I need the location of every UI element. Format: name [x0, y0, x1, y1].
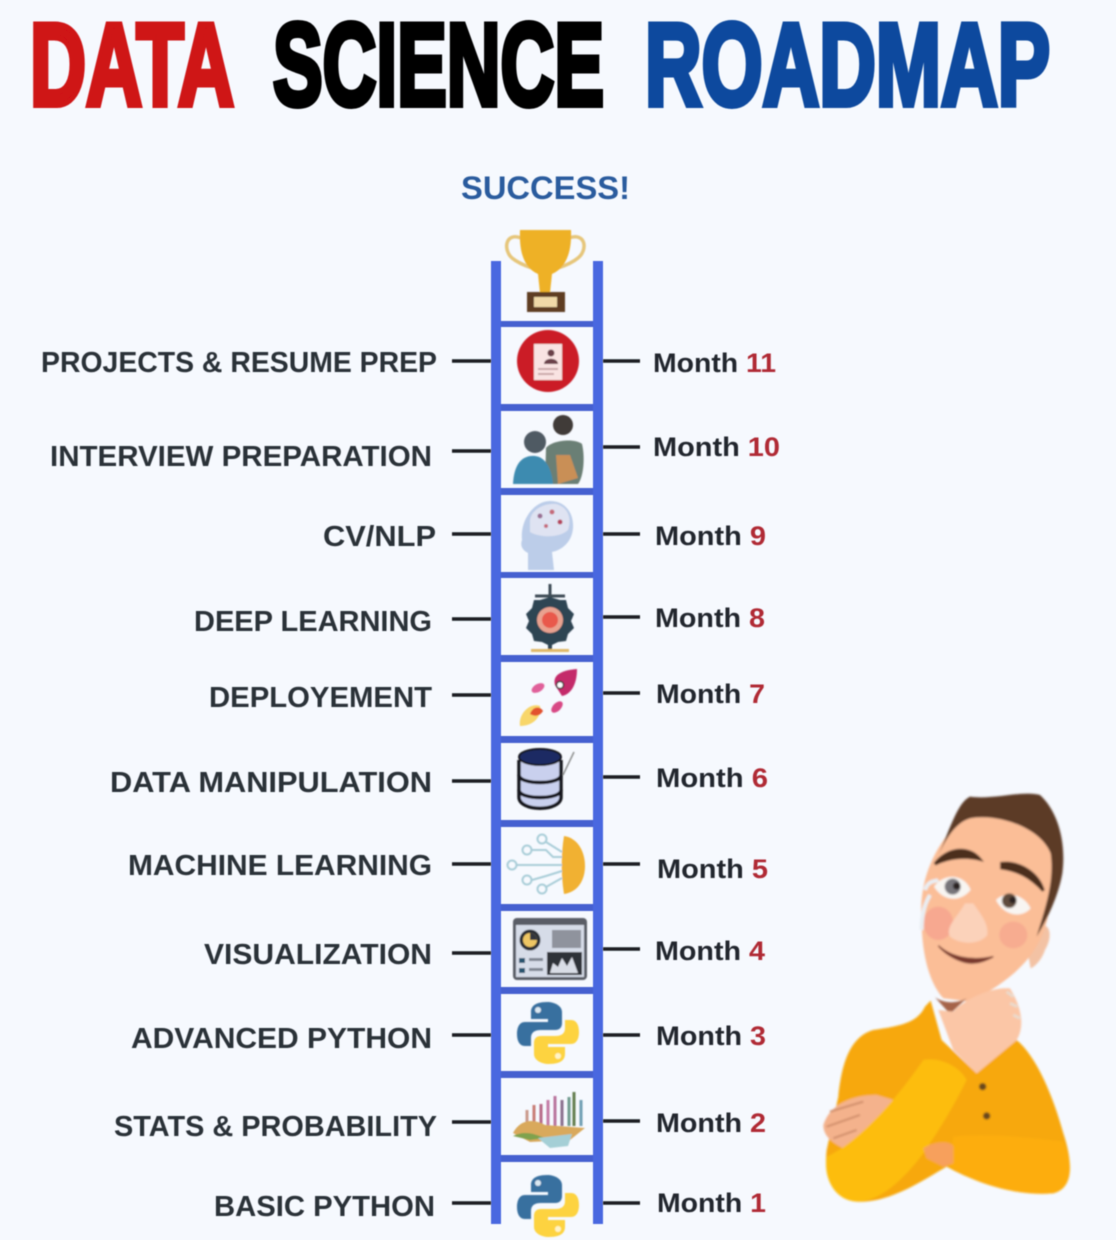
- hand on chin: [938, 988, 1021, 1073]
- label: deep learning: DEEP LEARNING: [194, 606, 432, 638]
- month 2: Month 2: [656, 1108, 766, 1138]
- heading: success: SUCCESS!: [461, 170, 630, 206]
- label: visualization: VISUALIZATION: [204, 939, 432, 971]
- month 10: Month 10: [653, 432, 780, 462]
- month 8: Month 8: [655, 603, 765, 633]
- fist under arm: [923, 1142, 953, 1167]
- label: cv/nlp: CV/NLP: [323, 521, 436, 553]
- eye right: [996, 895, 1031, 914]
- ear: [1027, 926, 1050, 968]
- icon: interview people: [513, 415, 584, 484]
- title: SCIENCE: [273, 0, 604, 130]
- pupil right: [1009, 897, 1016, 903]
- icon: stats chart: [513, 1092, 585, 1148]
- icon: database: [519, 749, 574, 808]
- label: basic python: BASIC PYTHON: [214, 1191, 435, 1223]
- month 1: Month 1: [657, 1188, 766, 1218]
- neck shadow: [935, 997, 967, 1014]
- hair: [935, 794, 1063, 937]
- lower sleeve: [950, 1135, 1070, 1194]
- icon: resume: [517, 330, 579, 392]
- face: [921, 817, 1053, 1002]
- month 11: Month 11: [653, 348, 776, 378]
- forearm bright: [826, 1059, 967, 1202]
- icon: python logo (basic): [517, 1175, 579, 1237]
- knuckles: [1007, 992, 1020, 1018]
- month 3: Month 3: [656, 1021, 766, 1051]
- icon: rocket: [520, 669, 577, 726]
- right month labels: [603, 348, 780, 1218]
- right cheek: [999, 922, 1027, 948]
- nose: [949, 903, 988, 943]
- glasses highlight: [922, 880, 938, 930]
- iris right: [1002, 893, 1017, 908]
- icon: brain head: [521, 501, 573, 570]
- title: [30, 0, 1050, 130]
- left labels: [41, 347, 491, 1223]
- button upper: [979, 1083, 986, 1090]
- month 6: Month 6: [656, 763, 768, 793]
- eyebrow left: [935, 850, 980, 864]
- icon: python logo (advanced): [517, 1002, 579, 1064]
- fingers: [827, 1102, 863, 1138]
- ladder: [491, 261, 603, 1224]
- label: machine learning: MACHINE LEARNING: [128, 850, 432, 882]
- month 5: Month 5: [657, 854, 768, 884]
- folded hand: [823, 1095, 893, 1148]
- icon: trophy: [507, 230, 584, 312]
- icon: machine learning brain: [508, 834, 585, 894]
- label: data manipulation: DATA MANIPULATION: [110, 767, 432, 799]
- eyebrow right: [1002, 863, 1043, 891]
- eye left: [934, 877, 971, 899]
- button lower: [983, 1112, 990, 1120]
- icon: deep learning gear: [526, 584, 574, 652]
- left cheek: [923, 907, 953, 940]
- label: stats and probability: STATS & PROBABILITY: [114, 1111, 437, 1143]
- pupil left: [953, 882, 960, 890]
- mouth: [938, 946, 993, 963]
- month 7: Month 7: [656, 679, 765, 709]
- icon: dashboard: [513, 918, 587, 980]
- character: thinking man: [823, 794, 1070, 1202]
- label: projects and resume prep: PROJECTS & RESUME PREP: [41, 347, 437, 379]
- label: interview preparation: INTERVIEW PREPARATION: [50, 441, 432, 473]
- month 9: Month 9: [655, 521, 766, 551]
- shirt: [826, 1001, 1070, 1202]
- iris left: [945, 879, 961, 895]
- month 4: Month 4: [655, 936, 765, 966]
- label: deployement: DEPLOYEMENT: [209, 682, 433, 714]
- label: advanced python: ADVANCED PYTHON: [131, 1023, 432, 1055]
- title: DATA: [30, 0, 234, 130]
